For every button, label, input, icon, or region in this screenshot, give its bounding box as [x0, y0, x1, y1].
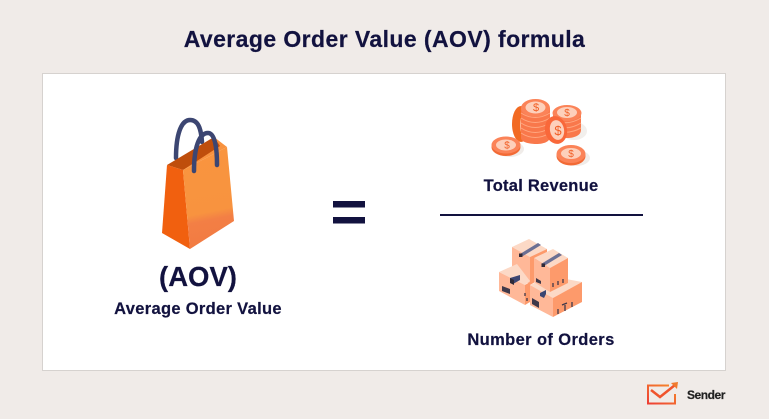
numerator: total revenue: Total Revenue — [484, 177, 598, 195]
icon: coins: $ — [554, 123, 562, 138]
denominator: number of orders: Number of Orders — [467, 331, 615, 349]
icon: shopping bag — [162, 118, 234, 249]
logo: Sender — [647, 382, 726, 404]
icon: coins: $ — [533, 102, 539, 114]
icon: envelope with arrow — [647, 382, 678, 404]
equals sign — [333, 201, 365, 224]
icon: coins — [492, 99, 590, 166]
title: Average Order Value (AOV) formula — [184, 26, 585, 52]
AOV label: (AOV) — [159, 261, 237, 292]
icon: stacked boxes — [499, 239, 582, 317]
brand name: Sender — [687, 388, 725, 402]
icon: coins: $ — [564, 108, 570, 119]
fraction line — [440, 214, 643, 216]
panel: formula — [42, 73, 726, 371]
icon: coins: $ — [504, 140, 510, 152]
AOV description: Average Order Value — [114, 300, 282, 318]
icon: coins: $ — [568, 149, 574, 160]
